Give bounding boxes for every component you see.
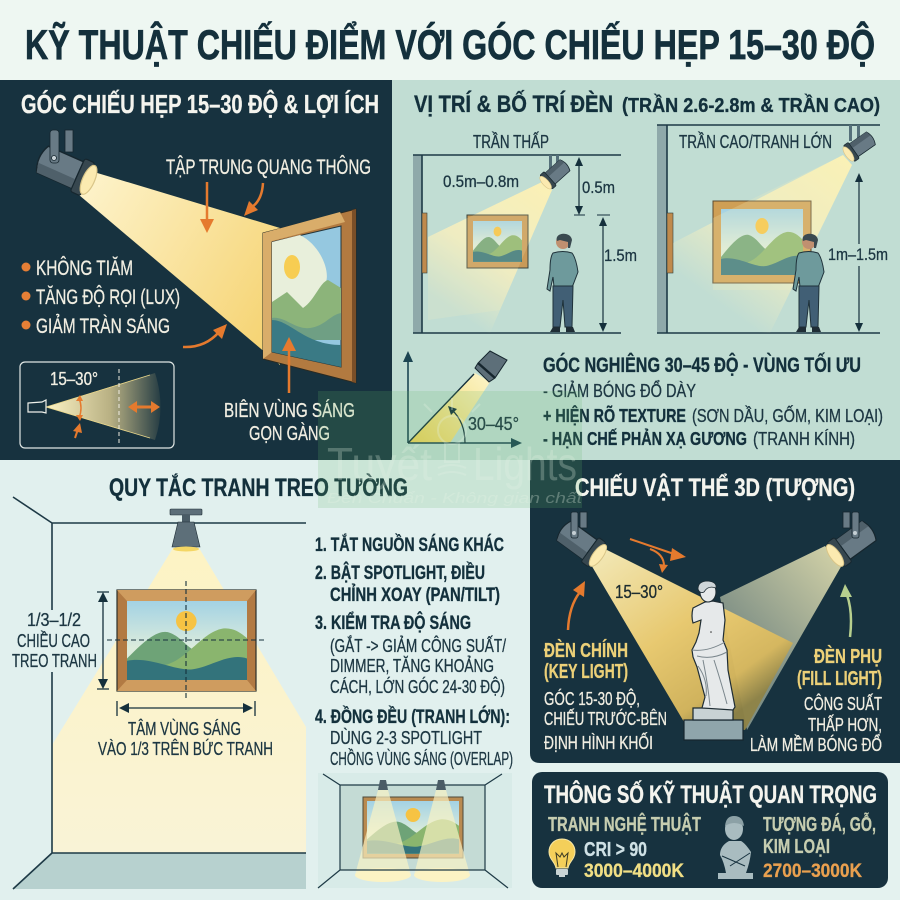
- icon: fill spotlight: [822, 512, 880, 570]
- icon: key spotlight: [553, 512, 611, 570]
- arrow: key light pointer: [568, 581, 585, 630]
- framed painting in perspective: [263, 209, 356, 383]
- steps list: CHỈNH XOAY (PAN/TILT): [330, 583, 500, 606]
- label: hanging height: 1/3–1/2: [27, 610, 81, 630]
- label: hanging height: TREO TRANH: [12, 651, 97, 671]
- label: key light: ĐÈN CHÍNH: [544, 639, 628, 662]
- header band: [0, 0, 900, 80]
- label: beam centre: [98, 718, 273, 759]
- label: hanging height: [12, 610, 97, 671]
- steps list: 1. TẮT NGUỒN SÁNG KHÁC: [315, 532, 504, 556]
- watermark: Đèn Chuẩn - Không gian chất: [327, 490, 583, 507]
- label: beam centre: VÀO 1/3 TRÊN BỨC TRANH: [98, 738, 273, 759]
- label: key light: ĐỊNH HÌNH KHỐI: [544, 732, 653, 753]
- watermark: Lights: [473, 438, 577, 490]
- steps list: [315, 532, 513, 769]
- steps list: CÁCH, LỚN GÓC 24-30 ĐỘ): [330, 676, 505, 697]
- key light beam: [590, 550, 793, 730]
- room floor: [13, 853, 306, 889]
- label: clean beam edge: BIÊN VÙNG SÁNG: [224, 399, 355, 422]
- painting with centre lines: [107, 581, 267, 700]
- dimension: hanging height: [97, 592, 109, 689]
- light beam: [79, 172, 280, 365]
- panel: lamp placement: [392, 80, 900, 460]
- label: key light: GÓC 15-30 ĐỘ,: [544, 688, 640, 709]
- arrow: up to painting: [282, 337, 296, 393]
- arrow: fill light pointer: [840, 584, 852, 637]
- diagram: high ceiling: TRẦN CAO/TRANH LỚN: [679, 131, 832, 152]
- label: clean beam edge: [224, 399, 355, 445]
- heading: lamp placement: [414, 90, 880, 118]
- inset: beam angle diagram: 15–30°: [50, 369, 98, 389]
- label: key light: (KEY LIGHT): [544, 661, 628, 683]
- steps list: 2. BẬT SPOTLIGHT, ĐIỀU: [315, 560, 485, 584]
- inset: beam angle diagram: [20, 362, 174, 448]
- art paintings values: [584, 839, 684, 882]
- icon: light bulb: [549, 839, 575, 877]
- icon: ceiling spotlight: [170, 509, 202, 552]
- heading: beam benefits: GÓC CHIẾU HẸP 15–30 ĐỘ & LỢI ÍCH: [21, 89, 379, 119]
- steps list: CHỒNG VÙNG SÁNG (OVERLAP): [330, 748, 513, 769]
- sculpture values: [763, 812, 876, 882]
- wall light beam: [52, 548, 306, 853]
- diagram: low ceiling: 0.5m–0.8m: [443, 173, 519, 191]
- benefits list: [22, 257, 180, 338]
- tilt angle list: - GIẢM BÓNG ĐỔ DÀY: [543, 380, 696, 401]
- art paintings values: 3000–4000K: [584, 861, 684, 882]
- label: art paintings: TRANH NGHỆ THUẬT: [548, 812, 701, 836]
- diagram: high ceiling: [657, 125, 890, 333]
- diagram: low ceiling: [413, 131, 637, 333]
- statue: [684, 581, 743, 740]
- tilt angle list: + HIỆN RÕ TEXTURE: [543, 405, 686, 426]
- arrow: down into beam: [200, 182, 214, 233]
- benefits list: TĂNG ĐỘ RỌI (LUX): [36, 286, 180, 309]
- icon: spotlight: [32, 130, 101, 199]
- panel: key specifications: [532, 772, 888, 888]
- benefits list: GIẢM TRÀN SÁNG: [36, 315, 170, 338]
- steps list: (GẮT -> GIẢM CÔNG SUẤT/: [330, 635, 506, 656]
- diagram: high ceiling: 1m–1.5m: [828, 246, 888, 264]
- panel: wall hanging rule: [0, 460, 530, 900]
- arrow: curved to lower beam edge: [183, 324, 227, 347]
- label: clean beam edge: GỌN GÀNG: [249, 422, 330, 445]
- label: beam angle: 15–30°: [615, 582, 663, 602]
- art paintings values: CRI > 90: [584, 839, 647, 861]
- steps list: 4. ĐỒNG ĐỀU (TRANH LỚN):: [315, 704, 510, 728]
- watermark: Tuyết: [327, 438, 432, 490]
- diagram: tilt angle: 30–45°: [468, 414, 519, 434]
- benefits list: KHÔNG TIĂM: [36, 257, 133, 280]
- diagram: low ceiling: 0.5m: [582, 179, 615, 197]
- tilt angle list: - HẠN CHẾ PHẢN XẠ GƯƠNG: [543, 428, 747, 449]
- watermark: [318, 391, 583, 508]
- fill light beam: [720, 546, 842, 730]
- diagram: low ceiling: TRẦN THẤP: [473, 131, 549, 152]
- tilt angle list: (TRANH KÍNH): [753, 428, 855, 449]
- arrow: aim direction: [630, 539, 686, 573]
- sculpture values: 2700–3000K: [763, 861, 862, 882]
- tilt angle list: [543, 380, 883, 449]
- heading: wall hanging rule: QUY TẮC TRANH TREO TƯỜNG: [109, 472, 408, 502]
- label: focused flux: TẬP TRUNG QUANG THÔNG: [166, 156, 371, 179]
- steps list: DIMMER, TĂNG KHOẢNG: [330, 655, 494, 676]
- label: hanging height: CHIỀU CAO: [17, 630, 90, 651]
- heading: lamp placement: VỊ TRÍ & BỐ TRÍ ĐÈN: [414, 90, 613, 118]
- steps list: DÙNG 2-3 SPOTLIGHT: [330, 727, 482, 748]
- panel: narrow beam benefits: [0, 80, 392, 460]
- diagram: overlapping spotlights: [318, 773, 512, 888]
- steps list: 3. KIỂM TRA ĐỘ SÁNG: [315, 610, 471, 634]
- dimension: painting width: [117, 701, 255, 716]
- arrow: curved to beam edge: [244, 183, 263, 216]
- icon: bust: [718, 816, 753, 879]
- heading: lamp placement: (TRẦN 2.6-2.8m & TRẦN CAO): [622, 94, 880, 117]
- label: beam centre: TÂM VÙNG SÁNG: [128, 718, 241, 739]
- room outline: [13, 497, 306, 889]
- label: key light: CHIẾU TRƯỚC-BÊN: [544, 708, 667, 729]
- sculpture values: KIM LOẠI: [763, 836, 830, 858]
- diagram: low ceiling: 1.5m: [604, 247, 637, 265]
- panel: 3D object lighting: [530, 460, 900, 763]
- diagram: tilt angle: [403, 351, 522, 448]
- label: key light: [544, 639, 667, 753]
- label: fill light: [750, 645, 882, 755]
